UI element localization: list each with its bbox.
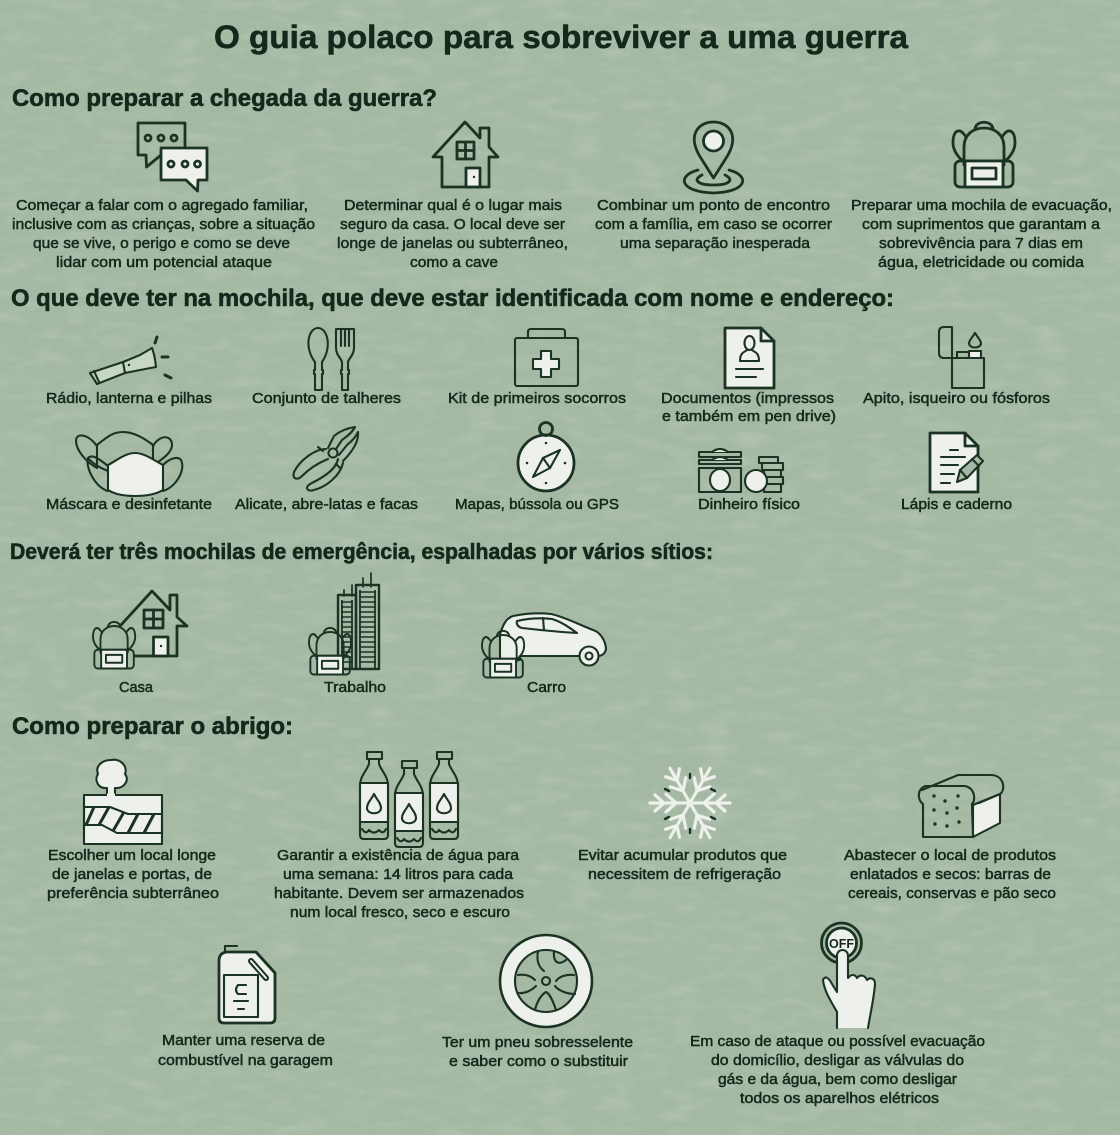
icon: flashlight bbox=[90, 337, 171, 384]
title: O guia polaco para sobreviver a uma guerra bbox=[214, 19, 908, 55]
text: ponto de encontro: Combinar um ponto de encontro bbox=[597, 197, 830, 214]
text: lugar seguro: longe de janelas ou subterrâneo, bbox=[337, 235, 568, 252]
icon: off button with hand: OFF bbox=[829, 936, 854, 951]
label: alicate: Alicate, abre-latas e facas bbox=[235, 496, 418, 513]
icon: pliers bbox=[294, 427, 358, 491]
icon: house bbox=[433, 122, 498, 187]
text: mochila de evacuação: água, eletricidade ou comida bbox=[878, 254, 1085, 271]
text: refrigeracao: necessitem de refrigeração bbox=[588, 866, 781, 883]
label: mascara: Máscara e desinfetante bbox=[46, 496, 212, 513]
label: documentos: e também em pen drive) bbox=[662, 408, 836, 425]
label: trabalho: Trabalho bbox=[324, 679, 386, 696]
text: refrigeracao: Evitar acumular produtos que bbox=[578, 847, 787, 864]
icon: off button with hand bbox=[822, 923, 875, 1028]
text: agua: Garantir a existência de água para bbox=[277, 847, 520, 864]
heading: tres mochilas: Deverá ter três mochilas de emergência, espalhadas por vários sítios: bbox=[10, 539, 713, 564]
text: pneu: e saber como o substituir bbox=[449, 1053, 628, 1070]
icon: snowflake bbox=[650, 764, 730, 842]
heading: abrigo: Como preparar o abrigo: bbox=[12, 713, 293, 740]
text: desligar bbox=[690, 1033, 985, 1107]
text: mochila de evacuação: Preparar uma mochila de evacuação, bbox=[851, 197, 1112, 214]
text: lugar seguro bbox=[337, 197, 568, 271]
label: lapis: Lápis e caderno bbox=[901, 496, 1012, 513]
label: documentos bbox=[661, 390, 836, 425]
text: lugar seguro: como a cave bbox=[410, 254, 498, 271]
icon: bread bbox=[919, 775, 1003, 837]
label: documentos: Documentos (impressos bbox=[661, 390, 834, 407]
text: combustivel: Manter uma reserva de bbox=[162, 1032, 325, 1049]
text: local longe: Escolher um local longe bbox=[48, 847, 216, 864]
icon: compass bbox=[518, 422, 574, 491]
icon: underground shelter bbox=[84, 760, 162, 844]
text: produtos: enlatados e secos: barras de bbox=[850, 866, 1051, 883]
text: local longe: de janelas e portas, de bbox=[52, 866, 212, 883]
icon: map pin bbox=[684, 122, 743, 193]
text: mochila de evacuação: com suprimentos que garantam a bbox=[862, 216, 1101, 233]
heading: como preparar a chegada: Como preparar a chegada da guerra? bbox=[12, 85, 437, 112]
text: refrigeracao bbox=[578, 847, 787, 883]
text: local longe bbox=[47, 847, 219, 902]
text: desligar: do domicílio, desligar as válvulas do bbox=[711, 1052, 964, 1069]
label: radio: Rádio, lanterna e pilhas bbox=[46, 390, 212, 407]
label: mapas: Mapas, bússola ou GPS bbox=[455, 496, 619, 513]
text: local longe: preferência subterrâneo bbox=[47, 885, 219, 902]
text: ponto de encontro: uma separação inesperada bbox=[620, 235, 811, 252]
label: talheres: Conjunto de talheres bbox=[252, 390, 401, 407]
text: pneu bbox=[442, 1034, 633, 1070]
heading: mochila: O que deve ter na mochila, que deve estar identificada com nome e endereço: bbox=[11, 285, 894, 312]
text: lugar seguro: seguro da casa. O local deve ser bbox=[340, 216, 565, 233]
text: produtos: cereais, conservas e pão seco bbox=[848, 885, 1056, 902]
label: kit: Kit de primeiros socorros bbox=[448, 390, 626, 407]
text: falar com o agregado bbox=[12, 197, 315, 271]
icon: notebook bbox=[930, 433, 983, 492]
text: mochila de evacuação bbox=[851, 197, 1112, 271]
text: combustivel bbox=[158, 1032, 333, 1069]
text: ponto de encontro: com a família, em caso se ocorrer bbox=[595, 216, 832, 233]
icon: document bbox=[725, 328, 774, 388]
icon: house with backpack bbox=[93, 591, 187, 669]
icon: backpack bbox=[953, 122, 1015, 187]
text: produtos: Abastecer o local de produtos bbox=[844, 847, 1056, 864]
text: combustivel: combustível na garagem bbox=[158, 1052, 333, 1069]
label: apito: Apito, isqueiro ou fósforos bbox=[863, 390, 1050, 407]
text: falar com o agregado: que se vive, o perigo e como se deve bbox=[33, 235, 290, 252]
text: desligar: Em caso de ataque ou possível evacuação bbox=[690, 1033, 985, 1050]
text: agua: habitante. Devem ser armazenados bbox=[274, 885, 524, 902]
icon: buildings with backpack bbox=[309, 573, 379, 675]
icon: first aid kit bbox=[515, 329, 578, 386]
text: falar com o agregado: Começar a falar com o agregado familiar, bbox=[16, 197, 308, 214]
text: ponto de encontro bbox=[595, 197, 832, 252]
icon: lighter bbox=[939, 327, 984, 388]
icon: fuel can bbox=[219, 946, 275, 1023]
text: agua: num local fresco, seco e escuro bbox=[290, 904, 510, 921]
text: lugar seguro: Determinar qual é o lugar mais bbox=[344, 197, 562, 214]
text: falar com o agregado: lidar com um potencial ataque bbox=[56, 254, 272, 271]
label: carro: Carro bbox=[527, 679, 566, 696]
text: agua bbox=[274, 847, 524, 921]
text: mochila de evacuação: sobrevivência para 7 dias em bbox=[879, 235, 1083, 252]
icon: speech bubbles bbox=[138, 123, 207, 191]
icon: money bbox=[699, 449, 783, 492]
label: dinheiro: Dinheiro físico bbox=[698, 496, 800, 513]
icon: car with backpack bbox=[482, 613, 606, 678]
text: falar com o agregado: inclusive com as crianças, sobre a situação bbox=[12, 216, 315, 233]
text: produtos bbox=[844, 847, 1056, 902]
icon: mask bbox=[76, 432, 182, 496]
icon: water bottles bbox=[360, 752, 458, 847]
text: desligar: todos os aparelhos elétricos bbox=[740, 1090, 939, 1107]
icon: cutlery bbox=[308, 328, 354, 390]
text: pneu: Ter um pneu sobresselente bbox=[442, 1034, 633, 1051]
text: agua: uma semana: 14 litros para cada bbox=[283, 866, 514, 883]
text: desligar: gás e da água, bem como desligar bbox=[718, 1071, 957, 1088]
icon: tire bbox=[500, 935, 592, 1027]
label: casa: Casa bbox=[119, 679, 154, 696]
